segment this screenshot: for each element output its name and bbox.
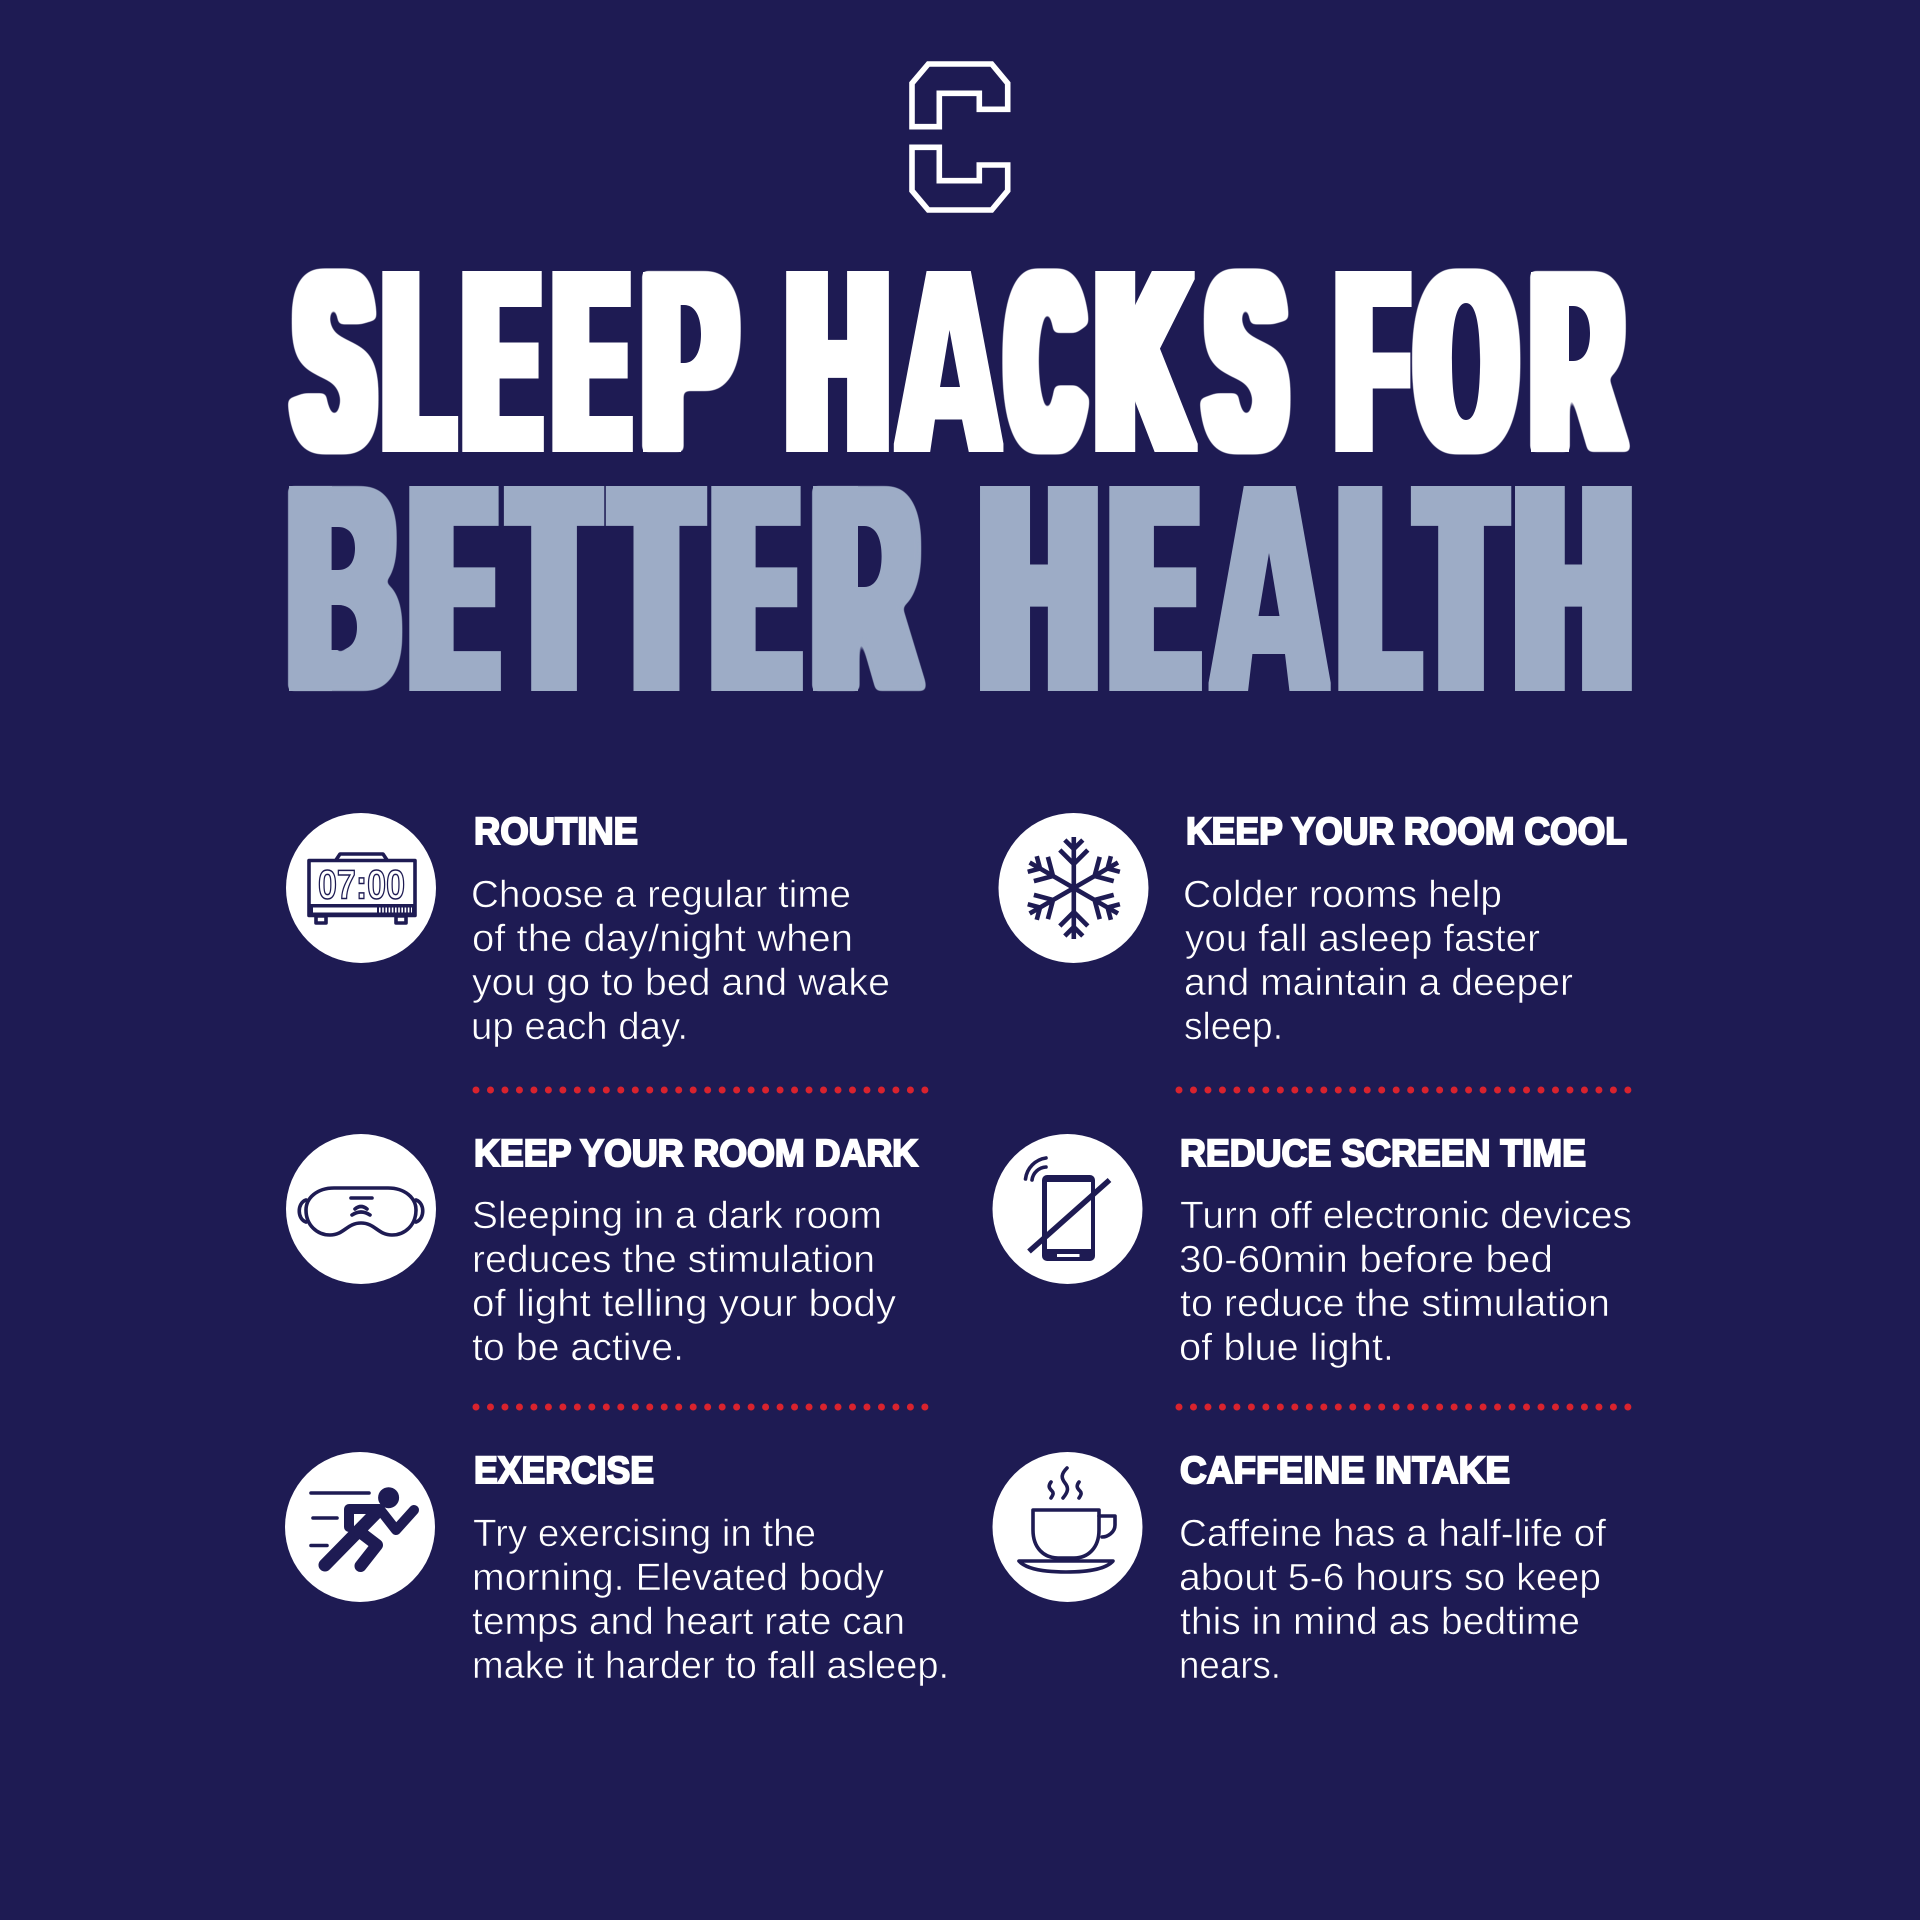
title line 1: SLEEP HACKS FOR: P bbox=[644, 220, 734, 502]
heading: exercise: EXERCISE bbox=[474, 1450, 654, 1492]
icon: sleep mask bbox=[286, 1134, 436, 1284]
title line 2: BETTER HEALTH bbox=[289, 428, 1628, 749]
text: exercise body bbox=[472, 1513, 949, 1687]
title line 2: BETTER HEALTH: T bbox=[516, 428, 592, 748]
icon: runner bbox=[285, 1452, 435, 1602]
title line 1: SLEEP HACKS FOR: S bbox=[296, 221, 372, 502]
text: caffeine body: Caffeine has a half-life of bbox=[1179, 1513, 1606, 1555]
icon: alarm clock bbox=[286, 813, 436, 963]
title line 2: BETTER HEALTH: E bbox=[718, 429, 793, 749]
text: screen time body: to reduce the stimulation bbox=[1180, 1283, 1610, 1325]
text: caffeine body: about 5-6 hours so keep bbox=[1179, 1557, 1601, 1599]
panel: routine bbox=[286, 811, 890, 1048]
title line 1: SLEEP HACKS FOR: F bbox=[1339, 220, 1404, 501]
title line 1: SLEEP HACKS FOR: A bbox=[902, 222, 996, 502]
title line 2: BETTER HEALTH: H bbox=[1519, 428, 1628, 748]
text: screen time body bbox=[1179, 1195, 1632, 1369]
text: routine body: up each day. bbox=[471, 1006, 688, 1048]
title line 1: SLEEP HACKS FOR: E bbox=[556, 221, 626, 502]
text: caffeine body: nears. bbox=[1179, 1645, 1281, 1687]
title line 1: SLEEP HACKS FOR: L bbox=[386, 221, 450, 502]
text: room cool body: Colder rooms help bbox=[1183, 874, 1502, 916]
panel: keep your room dark bbox=[286, 1133, 918, 1369]
title line 2: BETTER HEALTH: B bbox=[293, 428, 395, 748]
title line 2: BETTER HEALTH: R bbox=[817, 429, 915, 748]
title line 1: SLEEP HACKS FOR: R bbox=[1533, 220, 1622, 501]
text: room dark body: Sleeping in a dark room bbox=[472, 1195, 882, 1237]
title line 1: SLEEP HACKS FOR: E bbox=[466, 220, 537, 501]
icon: coffee cup bbox=[992, 1452, 1142, 1602]
text: exercise body: morning. Elevated body bbox=[472, 1557, 884, 1599]
heading: keep your room cool: KEEP YOUR ROOM COOL bbox=[1186, 811, 1627, 853]
text: caffeine body bbox=[1179, 1513, 1606, 1687]
text: room cool body bbox=[1183, 874, 1573, 1048]
text: room cool body: you fall asleep faster bbox=[1185, 918, 1540, 960]
heading: routine: ROUTINE bbox=[474, 811, 638, 853]
title line 2: BETTER HEALTH: H bbox=[984, 428, 1094, 748]
title line 2: BETTER HEALTH: L bbox=[1345, 429, 1413, 749]
text: exercise body: Try exercising in the bbox=[473, 1513, 816, 1555]
text: exercise body: make it harder to fall asleep. bbox=[472, 1645, 949, 1687]
heading: caffeine intake: CAFFEINE INTAKE bbox=[1180, 1450, 1510, 1492]
text: room cool body: sleep. bbox=[1184, 1006, 1283, 1048]
title line 2: BETTER HEALTH: E bbox=[1116, 429, 1192, 749]
text: routine body bbox=[471, 874, 890, 1048]
logo: collegiate C bbox=[912, 64, 1008, 210]
text: caffeine body: this in mind as bedtime bbox=[1180, 1601, 1580, 1643]
title line 2: BETTER HEALTH: T bbox=[1424, 428, 1499, 748]
text: room dark body: reduces the stimulation bbox=[472, 1239, 875, 1281]
title line 1: SLEEP HACKS FOR: C bbox=[1009, 220, 1081, 502]
text: routine body: Choose a regular time bbox=[471, 874, 851, 916]
text: routine body: you go to bed and wake bbox=[472, 962, 890, 1004]
title line 1: SLEEP HACKS FOR: O bbox=[1418, 221, 1515, 503]
text: room cool body: and maintain a deeper bbox=[1184, 962, 1573, 1004]
heading: keep your room dark: KEEP YOUR ROOM DARK bbox=[474, 1133, 918, 1175]
text: room dark body bbox=[472, 1195, 896, 1369]
title line 1: SLEEP HACKS FOR: H bbox=[788, 221, 887, 501]
text: room dark body: to be active. bbox=[472, 1327, 684, 1369]
text: screen time body: Turn off electronic devices bbox=[1180, 1195, 1632, 1237]
title line 1: SLEEP HACKS FOR: K bbox=[1098, 221, 1188, 502]
panel: reduce screen time bbox=[992, 1133, 1632, 1369]
icon: snowflake bbox=[998, 813, 1148, 963]
panel: exercise bbox=[285, 1450, 949, 1687]
text: screen time body: 30-60min before bed bbox=[1179, 1239, 1553, 1281]
title line 2: BETTER HEALTH: A bbox=[1219, 428, 1320, 748]
title line 1: SLEEP HACKS FOR: S bbox=[1208, 221, 1284, 502]
text: exercise body: temps and heart rate can bbox=[472, 1601, 905, 1643]
heading: reduce screen time: REDUCE SCREEN TIME bbox=[1180, 1133, 1586, 1175]
icon: phone crossed out bbox=[992, 1134, 1142, 1284]
text: screen time body: of blue light. bbox=[1179, 1327, 1394, 1369]
title line 1: SLEEP HACKS FOR bbox=[296, 220, 1622, 503]
panel: keep your room cool bbox=[998, 811, 1627, 1048]
title line 2: BETTER HEALTH: T bbox=[618, 428, 695, 748]
panel: caffeine intake bbox=[992, 1450, 1606, 1687]
text: room dark body: of light telling your body bbox=[472, 1283, 896, 1325]
text: routine body: of the day/night when bbox=[472, 918, 853, 960]
icon: alarm clock: 07:00 bbox=[318, 862, 405, 908]
title line 2: BETTER HEALTH: E bbox=[416, 429, 491, 749]
